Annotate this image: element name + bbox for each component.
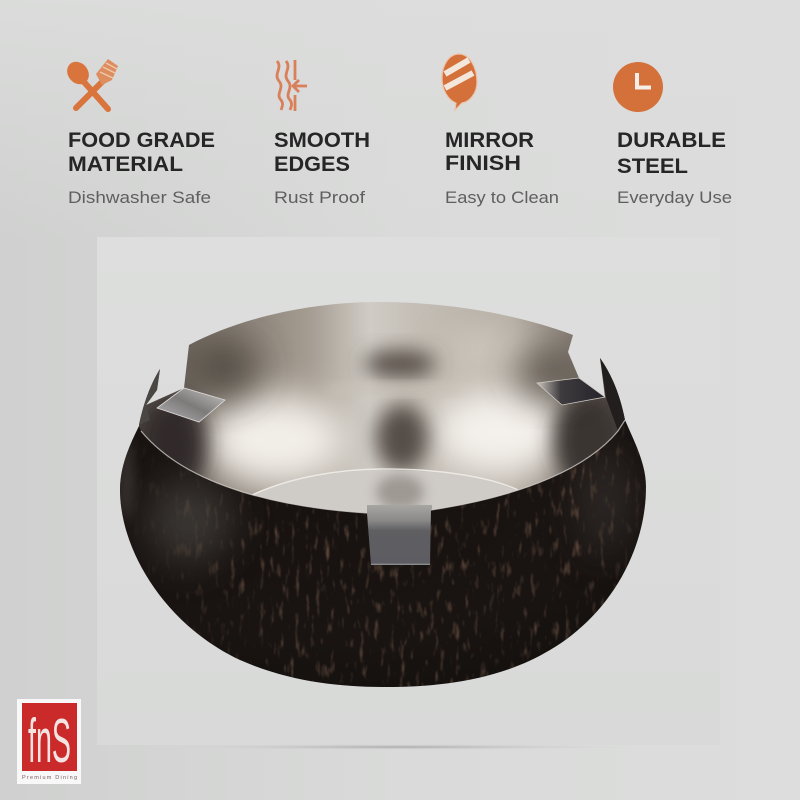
right notch tab and tip [537, 358, 625, 431]
subtext: everyday use: Everyday Use [617, 188, 732, 207]
steel interior [139, 302, 625, 512]
floor of the bowl [254, 470, 516, 512]
icon: clock [613, 62, 663, 112]
product: ashtray bowl [115, 295, 650, 690]
product photo panel [97, 237, 720, 750]
icon: wavy edges with arrow [277, 60, 307, 111]
heading: food grade material: FOOD GRADE [68, 129, 215, 152]
icon: crossed spoon and spatula [63, 57, 118, 109]
front notch metal [367, 505, 432, 566]
feature 1: food grade material [63, 57, 215, 207]
feature 4: durable steel [613, 62, 732, 207]
heading: smooth edges: EDGES [274, 153, 350, 176]
dark wooden outer shell [115, 400, 650, 690]
heading: food grade material: MATERIAL [68, 153, 183, 176]
feature 3: mirror finish [442, 54, 559, 207]
polished rim highlight [141, 420, 625, 513]
heading: mirror finish: MIRROR [445, 129, 534, 152]
icon: striped mirror balloon [442, 54, 477, 110]
heading: smooth edges: SMOOTH [274, 129, 370, 152]
subtext: rust proof: Rust Proof [274, 188, 365, 207]
left notch tab and tip [139, 369, 225, 425]
heading: mirror finish: FINISH [445, 152, 521, 175]
subtext: dishwasher safe: Dishwasher Safe [68, 188, 211, 207]
heading: durable steel: STEEL [617, 155, 688, 178]
feature 2: smooth edges [274, 60, 370, 207]
heading: durable steel: DURABLE [617, 129, 726, 152]
subtext: easy to clean: Easy to Clean [445, 188, 559, 207]
logo tagline: Premium Dining [22, 775, 77, 781]
logo: fnS premium dining [17, 699, 81, 784]
logo: fnS premium dining: fnS [28, 707, 71, 776]
